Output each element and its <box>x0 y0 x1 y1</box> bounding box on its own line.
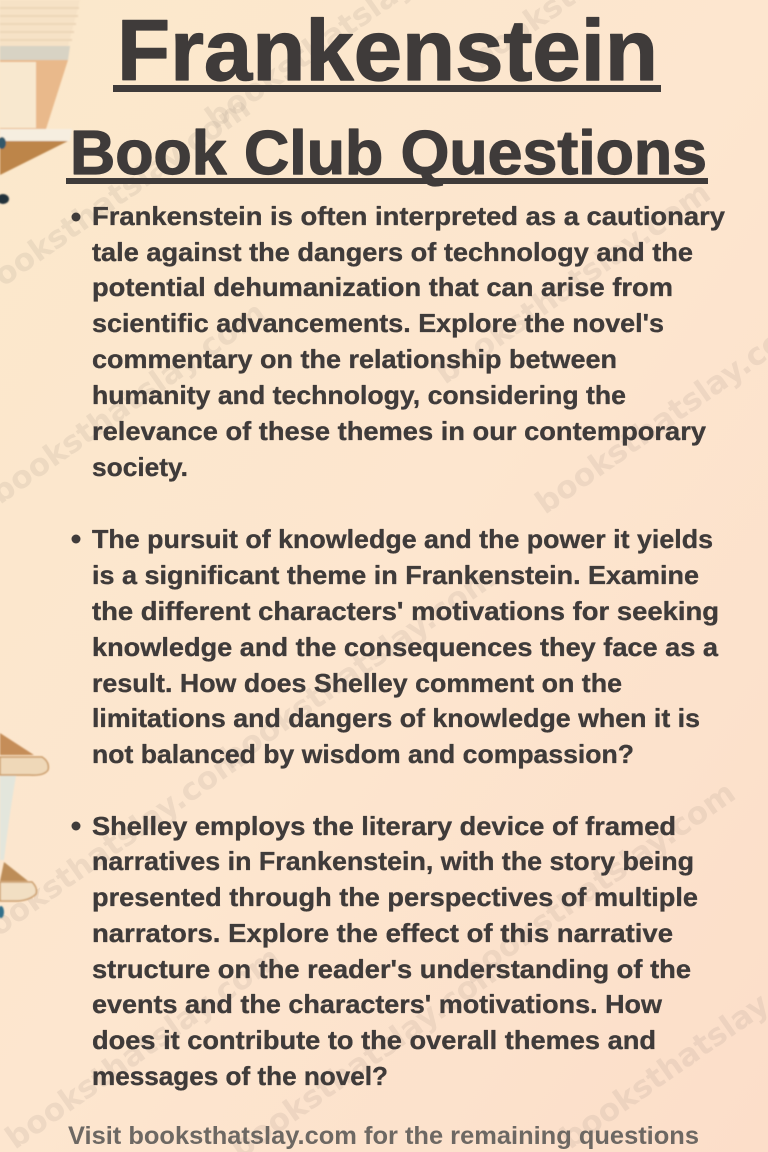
question 1: relevance of these themes in our contemporary <box>92 416 707 446</box>
subtitle: Book Club Questions <box>70 119 707 188</box>
question 3: does it contribute to the overall themes and <box>92 1025 656 1055</box>
question 2: limitations and dangers of knowledge when it is <box>92 703 700 733</box>
title: Frankenstein <box>117 3 658 99</box>
watermarks: booksthatslay.com <box>0 940 287 1152</box>
question 3: structure on the reader's understanding of the <box>92 954 691 984</box>
question 1: tale against the dangers of technology and the <box>92 237 693 267</box>
question 3: events and the characters' motivations. How <box>92 989 663 1019</box>
watermarks: booksthatslay.com <box>454 775 742 992</box>
question 2: result. How does Shelley comment on the <box>92 668 622 698</box>
question 1: potential dehumanization that can arise from <box>92 272 673 302</box>
question 1: society. <box>92 452 188 482</box>
question 1: commentary on the relationship between <box>92 344 617 374</box>
question 1: Frankenstein is often interpreted as a cautionary <box>92 201 726 231</box>
question 2: knowledge and the consequences they face as a <box>92 632 719 662</box>
question 3: presented through the perspectives of multiple <box>92 882 698 912</box>
illustration: stacked books at lower left <box>0 733 48 918</box>
question 1: humanity and technology, considering the <box>92 380 626 410</box>
question 3: messages of the novel? <box>92 1061 388 1091</box>
footer call to action: Visit booksthatslay.com for the remaining questions <box>68 1122 699 1150</box>
question 2: The pursuit of knowledge and the power it yields <box>92 524 713 554</box>
watermarks: booksthatslay.com <box>429 175 717 392</box>
question 2: is a significant theme in Frankenstein. Examine <box>92 560 699 590</box>
question 3 <box>72 811 698 1091</box>
question 1: scientific advancements. Explore the novel's <box>92 308 664 338</box>
question 3: Shelley employs the literary device of framed <box>92 811 676 841</box>
question 2 <box>72 524 719 769</box>
question 1 <box>72 201 726 482</box>
question 2: not balanced by wisdom and compassion? <box>92 739 634 769</box>
question 3: narrators. Explore the effect of this narrative <box>92 918 673 948</box>
question 2: the different characters' motivations for seeking <box>92 596 719 626</box>
illustration: stacked books at top left <box>0 0 80 204</box>
question 3: narratives in Frankenstein, with the story being <box>92 846 694 876</box>
watermarks: booksthatslay.com <box>214 560 502 777</box>
